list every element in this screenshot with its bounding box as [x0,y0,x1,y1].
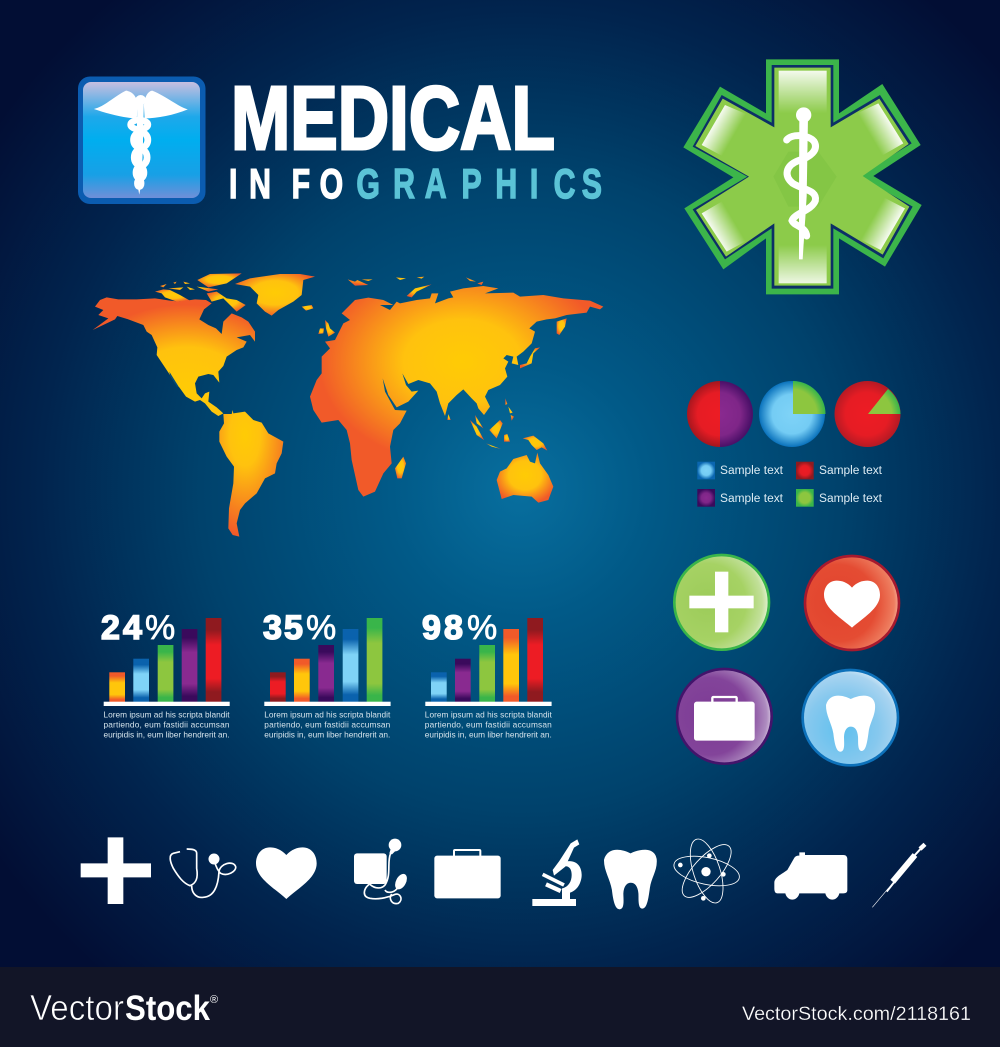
percent 35: % [306,609,336,647]
legend: blue [697,462,784,479]
bar chart group 1 [101,609,230,740]
legend: purple [697,489,784,507]
caption 3: Lorem ipsum ad his scripta blandit [425,710,552,720]
icon: stethoscope [170,849,236,897]
icon: heart [256,847,317,899]
percent 98 [422,609,497,647]
pie legend [697,462,883,507]
caption 1 [104,710,230,740]
percent 98: % [467,609,497,647]
icon: plus [81,837,151,904]
pie: red with green wedge [834,381,900,447]
button: purple briefcase [677,669,772,764]
subtitle: INFOGRAPHICS [229,160,602,207]
caption 2: Lorem ipsum ad his scripta blandit [264,710,391,720]
map: Eurasia, Africa and Oceania [310,277,603,503]
percent 35: 35 [263,609,303,647]
rod of asclepius [787,107,816,259]
button: green plus [674,555,769,650]
bottom icons, left half [81,837,501,904]
legend: red [796,462,883,479]
caption 3: euripidis in, eum liber hendrerit an. [425,730,552,740]
legend: green: Sample text [819,493,883,505]
icon: atom [671,835,742,907]
button: red heart [805,556,899,650]
pie charts [687,381,900,447]
footer logo: Vector [30,987,124,1028]
caption 2 [264,710,391,740]
map: Americas and Greenland [93,273,335,537]
pie: red and purple [687,381,753,447]
legend: red: Sample text [819,465,883,477]
caption 2: euripidis in, eum liber hendrerit an. [264,730,390,740]
icon: syringe [872,844,925,907]
icon: microscope [532,839,582,906]
icon: caduceus app button [78,76,206,204]
round icon buttons [674,555,899,765]
world map [93,273,603,537]
bar chart group 2 [263,609,391,740]
percent 24: % [145,609,175,647]
legend: blue: Sample text [720,465,784,477]
caduceus symbol [94,91,188,195]
subtitle teal part: GRAPHICS [356,160,602,207]
legend: purple: Sample text [720,493,784,505]
footer band [0,967,1000,1047]
legend: green [796,489,883,507]
caption 1: partiendo, eum fastidii accumsan [104,720,230,730]
caption 3 [425,710,552,740]
icon: briefcase [434,850,501,898]
footer logo [30,987,218,1028]
caption 2: partiendo, eum fastidii accumsan [264,720,391,730]
bar chart group 3 [422,609,552,740]
icon: blood pressure cuff [354,839,409,904]
percent 35 [263,609,336,647]
bottom icon row [81,835,925,909]
bottom icons, right half [532,835,925,909]
icon: ambulance [774,852,847,900]
icon: star of life [683,59,922,294]
pie: blue with green quadrant [759,381,826,447]
caption 1: euripidis in, eum liber hendrerit an. [104,730,230,740]
subtitle white part: INFO [229,160,343,207]
footer logo: Stock [125,989,210,1028]
icon: tooth [604,850,657,909]
percent 24 [101,609,175,647]
percent 98: 98 [422,609,463,647]
title: MEDICAL: MEDICAL [231,69,555,169]
percent 24: 24 [101,609,142,647]
footer logo: ® [210,994,218,1006]
caption 1: Lorem ipsum ad his scripta blandit [104,710,230,720]
footer image id: VectorStock.com/2118161 [742,1004,971,1025]
caption 3: partiendo, eum fastidii accumsan [425,720,552,730]
button: blue tooth [803,670,898,765]
